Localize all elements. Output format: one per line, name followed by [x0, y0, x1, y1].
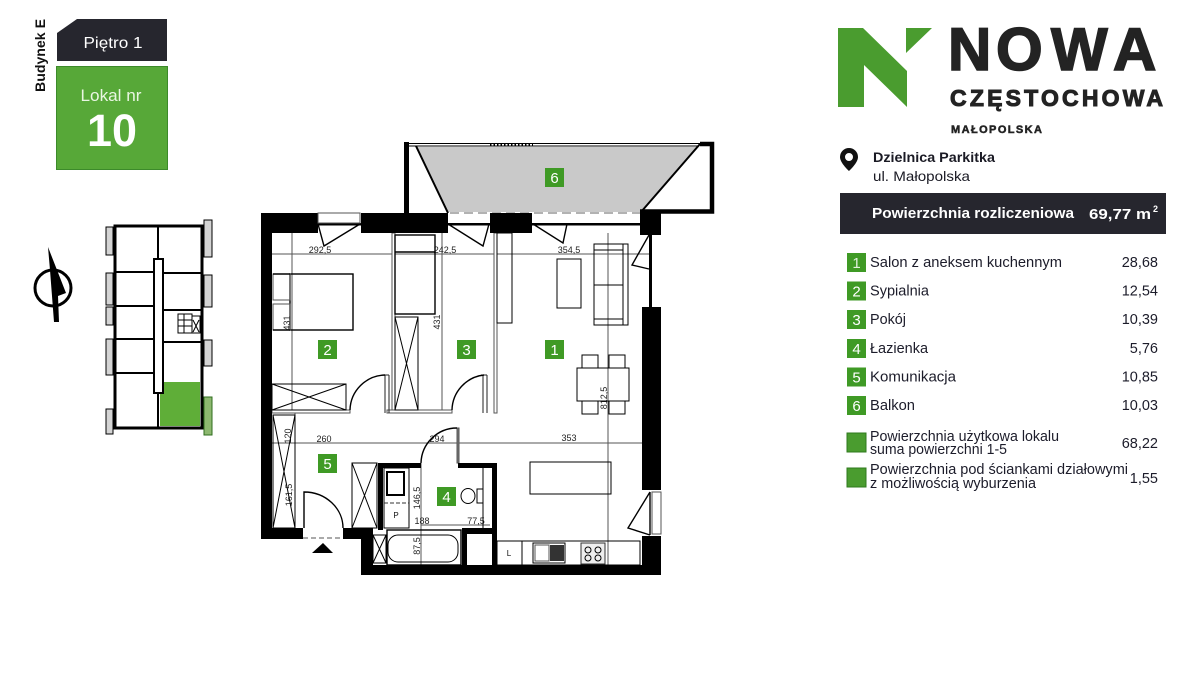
row: partition area [847, 462, 1158, 492]
room number markers: 5 [323, 456, 332, 473]
icon: entrance arrow [312, 543, 333, 553]
row: balkon: 10,03 [1122, 398, 1158, 414]
logo wordmark: NOWA [948, 16, 1156, 83]
dimension lines: 120 [283, 428, 293, 444]
building key plan [106, 220, 212, 435]
room area table [847, 253, 1158, 492]
row: sypialnia [847, 282, 1158, 300]
dimension lines: 77,5 [467, 516, 485, 526]
dimension lines: 353 [561, 433, 577, 443]
row: salon [847, 253, 1158, 272]
row: salon: Salon z aneksem kuchennym [870, 255, 1062, 271]
row: pokoj: Pokój [870, 312, 906, 328]
row: partition area: Powierzchnia pod ściankami działowymi [870, 462, 1128, 478]
room number markers: 3 [462, 342, 471, 359]
row: sypialnia: Sypialnia [870, 284, 930, 300]
row: sypialnia: 2 [852, 284, 861, 300]
row: usable area [847, 429, 1158, 458]
dimension lines: 161,5 [284, 484, 294, 506]
windows and doors [303, 213, 661, 538]
dimension lines: 242,5 [434, 245, 456, 255]
row: partition area: 1,55 [1130, 471, 1158, 487]
furniture [272, 233, 629, 528]
partition walls [272, 233, 497, 463]
row: salon: 28,68 [1122, 255, 1158, 271]
dimension lines: 87,5 [412, 537, 422, 555]
row: komunikacja [847, 368, 1158, 386]
row: usable area: 68,22 [1122, 436, 1158, 452]
balcony area [404, 142, 712, 214]
room number markers: 1 [550, 342, 559, 359]
row: komunikacja: 5 [852, 370, 861, 386]
total area bar: Powierzchnia rozliczeniowa [872, 205, 1075, 222]
row: lazienka: Łazienka [870, 341, 929, 357]
row: pokoj [847, 310, 1158, 329]
logo mark [838, 28, 932, 107]
row: lazienka [847, 339, 1158, 358]
total area bar [840, 193, 1166, 234]
logo wordmark: MAŁOPOLSKA [951, 124, 1042, 136]
bathroom fixtures: P [393, 511, 399, 520]
row: pokoj: 3 [852, 312, 861, 329]
dimension lines: 260 [316, 434, 332, 444]
row: balkon: 6 [852, 398, 861, 415]
address [873, 149, 995, 184]
unit number badge: 10 [87, 105, 137, 156]
room number markers: 6 [550, 170, 559, 187]
address: ul. Małopolska [873, 168, 970, 184]
kitchen units: L [507, 549, 512, 558]
dimension lines: 146,5 [412, 487, 422, 509]
address: Dzielnica Parkitka [873, 149, 995, 165]
dimension lines: 292,5 [309, 245, 331, 255]
logo wordmark: CZĘSTOCHOWA [950, 85, 1163, 111]
building label: Budynek E [32, 19, 48, 92]
row: komunikacja: Komunikacja [870, 370, 957, 386]
dimension lines: 431 [282, 315, 292, 331]
unit number badge: Lokal nr [80, 86, 142, 105]
dimension lines [272, 233, 650, 565]
row: partition area: z możliwością wyburzenia [870, 476, 1037, 492]
dimension lines: 294 [429, 434, 445, 444]
total area bar: 69,77 m [1089, 206, 1151, 223]
row: salon: 1 [852, 255, 861, 272]
row: lazienka: 5,76 [1130, 341, 1158, 357]
kitchen units [497, 541, 640, 565]
logo wordmark [948, 16, 1163, 136]
room number markers: 4 [442, 489, 451, 506]
floor badge: Piętro 1 [84, 35, 143, 52]
dimension lines: 812,5 [599, 387, 609, 409]
bathroom fixtures [373, 468, 483, 565]
row: usable area: Powierzchnia użytkowa lokalu [870, 429, 1059, 445]
room number markers [318, 168, 564, 506]
dimension lines: 354,5 [558, 245, 580, 255]
dimension lines: 188 [414, 516, 430, 526]
row: lazienka: 4 [852, 341, 861, 358]
row: balkon: Balkon [870, 398, 915, 414]
row: komunikacja: 10,85 [1122, 370, 1158, 386]
row: sypialnia: 12,54 [1122, 284, 1158, 300]
total area bar: 2 [1153, 204, 1158, 214]
floor badge [57, 19, 167, 61]
floor plan [261, 142, 712, 575]
row: pokoj: 10,39 [1122, 312, 1158, 328]
unit number badge [56, 66, 168, 170]
row: usable area: suma powierzchni 1-5 [870, 442, 1007, 458]
load-bearing walls [261, 212, 661, 575]
icon: location pin [840, 148, 858, 171]
icon: compass [35, 247, 71, 322]
room number markers: 2 [323, 342, 332, 359]
dimension lines: 431 [432, 314, 442, 330]
row: balkon [847, 396, 1158, 415]
